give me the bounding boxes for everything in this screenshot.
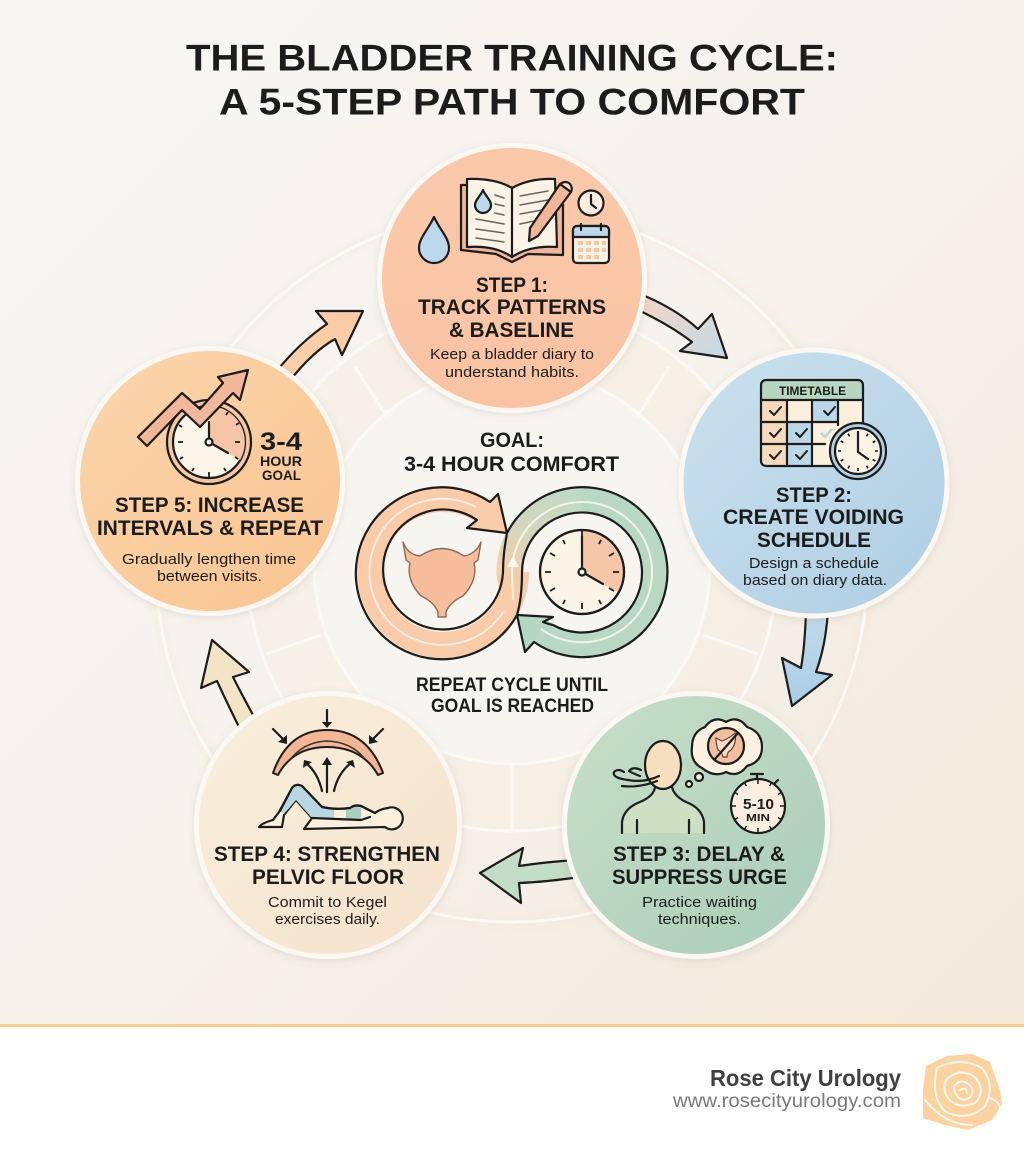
icon: clock xyxy=(540,530,624,614)
text: step 3 description xyxy=(642,894,757,928)
heading: step 1 xyxy=(418,273,606,342)
heading: goal: GOAL: xyxy=(480,428,544,452)
text: step 4 description: exercises daily. xyxy=(275,911,380,928)
heading: step 2: SCHEDULE xyxy=(757,528,871,552)
chart: infinity loop arrows xyxy=(356,487,667,659)
icon: person doing bridge exercise xyxy=(259,785,403,829)
icon: calendar xyxy=(573,224,609,263)
text: 3-4 hour goal xyxy=(260,428,302,483)
heading: step 4 xyxy=(214,842,440,889)
background concentric rings xyxy=(156,210,868,922)
panel: step 1 xyxy=(380,146,644,410)
arrow: step 1 to step 2 xyxy=(636,294,727,358)
text: step 5 description xyxy=(122,551,296,585)
text: 3-4 hour goal: GOAL xyxy=(262,467,301,483)
title xyxy=(186,38,838,122)
arrow: step 3 to step 4 xyxy=(480,848,580,903)
title: A 5-STEP PATH TO COMFORT xyxy=(219,82,805,122)
heading: step 2: CREATE VOIDING xyxy=(723,505,904,529)
text: step 4 description xyxy=(268,894,387,928)
panel: central goal xyxy=(356,428,667,717)
heading: step 3 xyxy=(612,842,787,889)
icon: 5-10 minute timer: 5-10 xyxy=(743,796,774,813)
heading: step 2 xyxy=(723,483,904,552)
text: brand name: Rose City Urology xyxy=(710,1065,901,1091)
icon: bladder xyxy=(403,542,481,617)
icon: clock xyxy=(167,400,251,484)
text: repeat cycle xyxy=(416,675,608,717)
heading: step 2: STEP 2: xyxy=(776,483,852,507)
icon: rising arrow xyxy=(138,370,248,446)
panel: step 5 xyxy=(78,348,342,614)
heading: step 1: & BASELINE xyxy=(449,318,574,342)
panel: step 3 xyxy=(564,694,828,956)
text: step 5 description: Gradually lengthen time xyxy=(122,551,296,568)
text: step 2 description: Design a schedule xyxy=(749,555,879,572)
heading: step 5 xyxy=(97,493,323,540)
icon: water drop xyxy=(419,217,449,263)
text: step 4 description: Commit to Kegel xyxy=(268,894,387,911)
heading: step 3: SUPPRESS URGE xyxy=(612,865,787,889)
icon: pelvic floor muscle with arrows xyxy=(273,710,383,792)
text: step 3 description: techniques. xyxy=(658,911,741,928)
text: step 2 description: based on diary data. xyxy=(743,572,887,589)
arrow head: peach xyxy=(467,494,507,533)
heading: step 4: STEP 4: STRENGTHEN xyxy=(214,842,440,866)
icon: 5-10 minute timer: MIN xyxy=(746,812,770,824)
band fills xyxy=(370,499,654,645)
text: repeat cycle: GOAL IS REACHED xyxy=(431,696,594,717)
icon: timetable: TIMETABLE xyxy=(779,386,846,398)
heading: goal xyxy=(404,428,619,476)
text: repeat cycle: REPEAT CYCLE UNTIL xyxy=(416,675,608,696)
heading: step 5: STEP 5: INCREASE xyxy=(115,493,304,517)
arrow: step 2 to step 3 xyxy=(782,610,832,706)
heading: step 3: STEP 3: DELAY & xyxy=(613,842,785,866)
loop highlights xyxy=(369,499,652,645)
icon: timetable xyxy=(761,380,863,466)
arrow head: green xyxy=(517,615,553,652)
arrow: step 5 to step 1 xyxy=(275,311,363,383)
icon: person breathing xyxy=(614,741,704,833)
icon: open diary with pen xyxy=(461,179,572,262)
text: step 5 description: between visits. xyxy=(157,568,262,585)
text: step 2 description xyxy=(743,555,887,589)
text: step 1 description: Keep a bladder diary to xyxy=(430,346,594,363)
text: 3-4 hour goal: HOUR xyxy=(260,453,302,469)
text: website: www.rosecityurology.com xyxy=(672,1090,901,1112)
text: 3-4 hour goal: 3-4 xyxy=(260,428,302,456)
heading: step 4: PELVIC FLOOR xyxy=(252,865,404,889)
icon: rose logo xyxy=(923,1054,1002,1130)
text: step 1 description: understand habits. xyxy=(445,364,579,381)
text: step 1 description xyxy=(430,346,594,381)
icon: thought bubble with crossed bladder xyxy=(686,719,762,787)
heading: goal: 3-4 HOUR COMFORT xyxy=(404,452,619,476)
heading: step 1: STEP 1: xyxy=(476,273,548,297)
icon: 5-10 minute timer xyxy=(731,774,785,833)
loop outlines xyxy=(356,487,667,659)
footer xyxy=(0,1024,1024,1154)
arrow: step 4 to step 5 xyxy=(201,640,258,733)
text: step 3 description: Practice waiting xyxy=(642,894,757,911)
panel: step 4 xyxy=(196,694,460,956)
heading: step 1: TRACK PATTERNS xyxy=(418,295,606,319)
heading: step 5: INTERVALS & REPEAT xyxy=(97,516,323,540)
title: THE BLADDER TRAINING CYCLE: xyxy=(186,38,838,78)
icon: clock xyxy=(830,423,886,479)
panel: step 2 xyxy=(681,350,947,616)
icon: clock xyxy=(578,190,604,216)
